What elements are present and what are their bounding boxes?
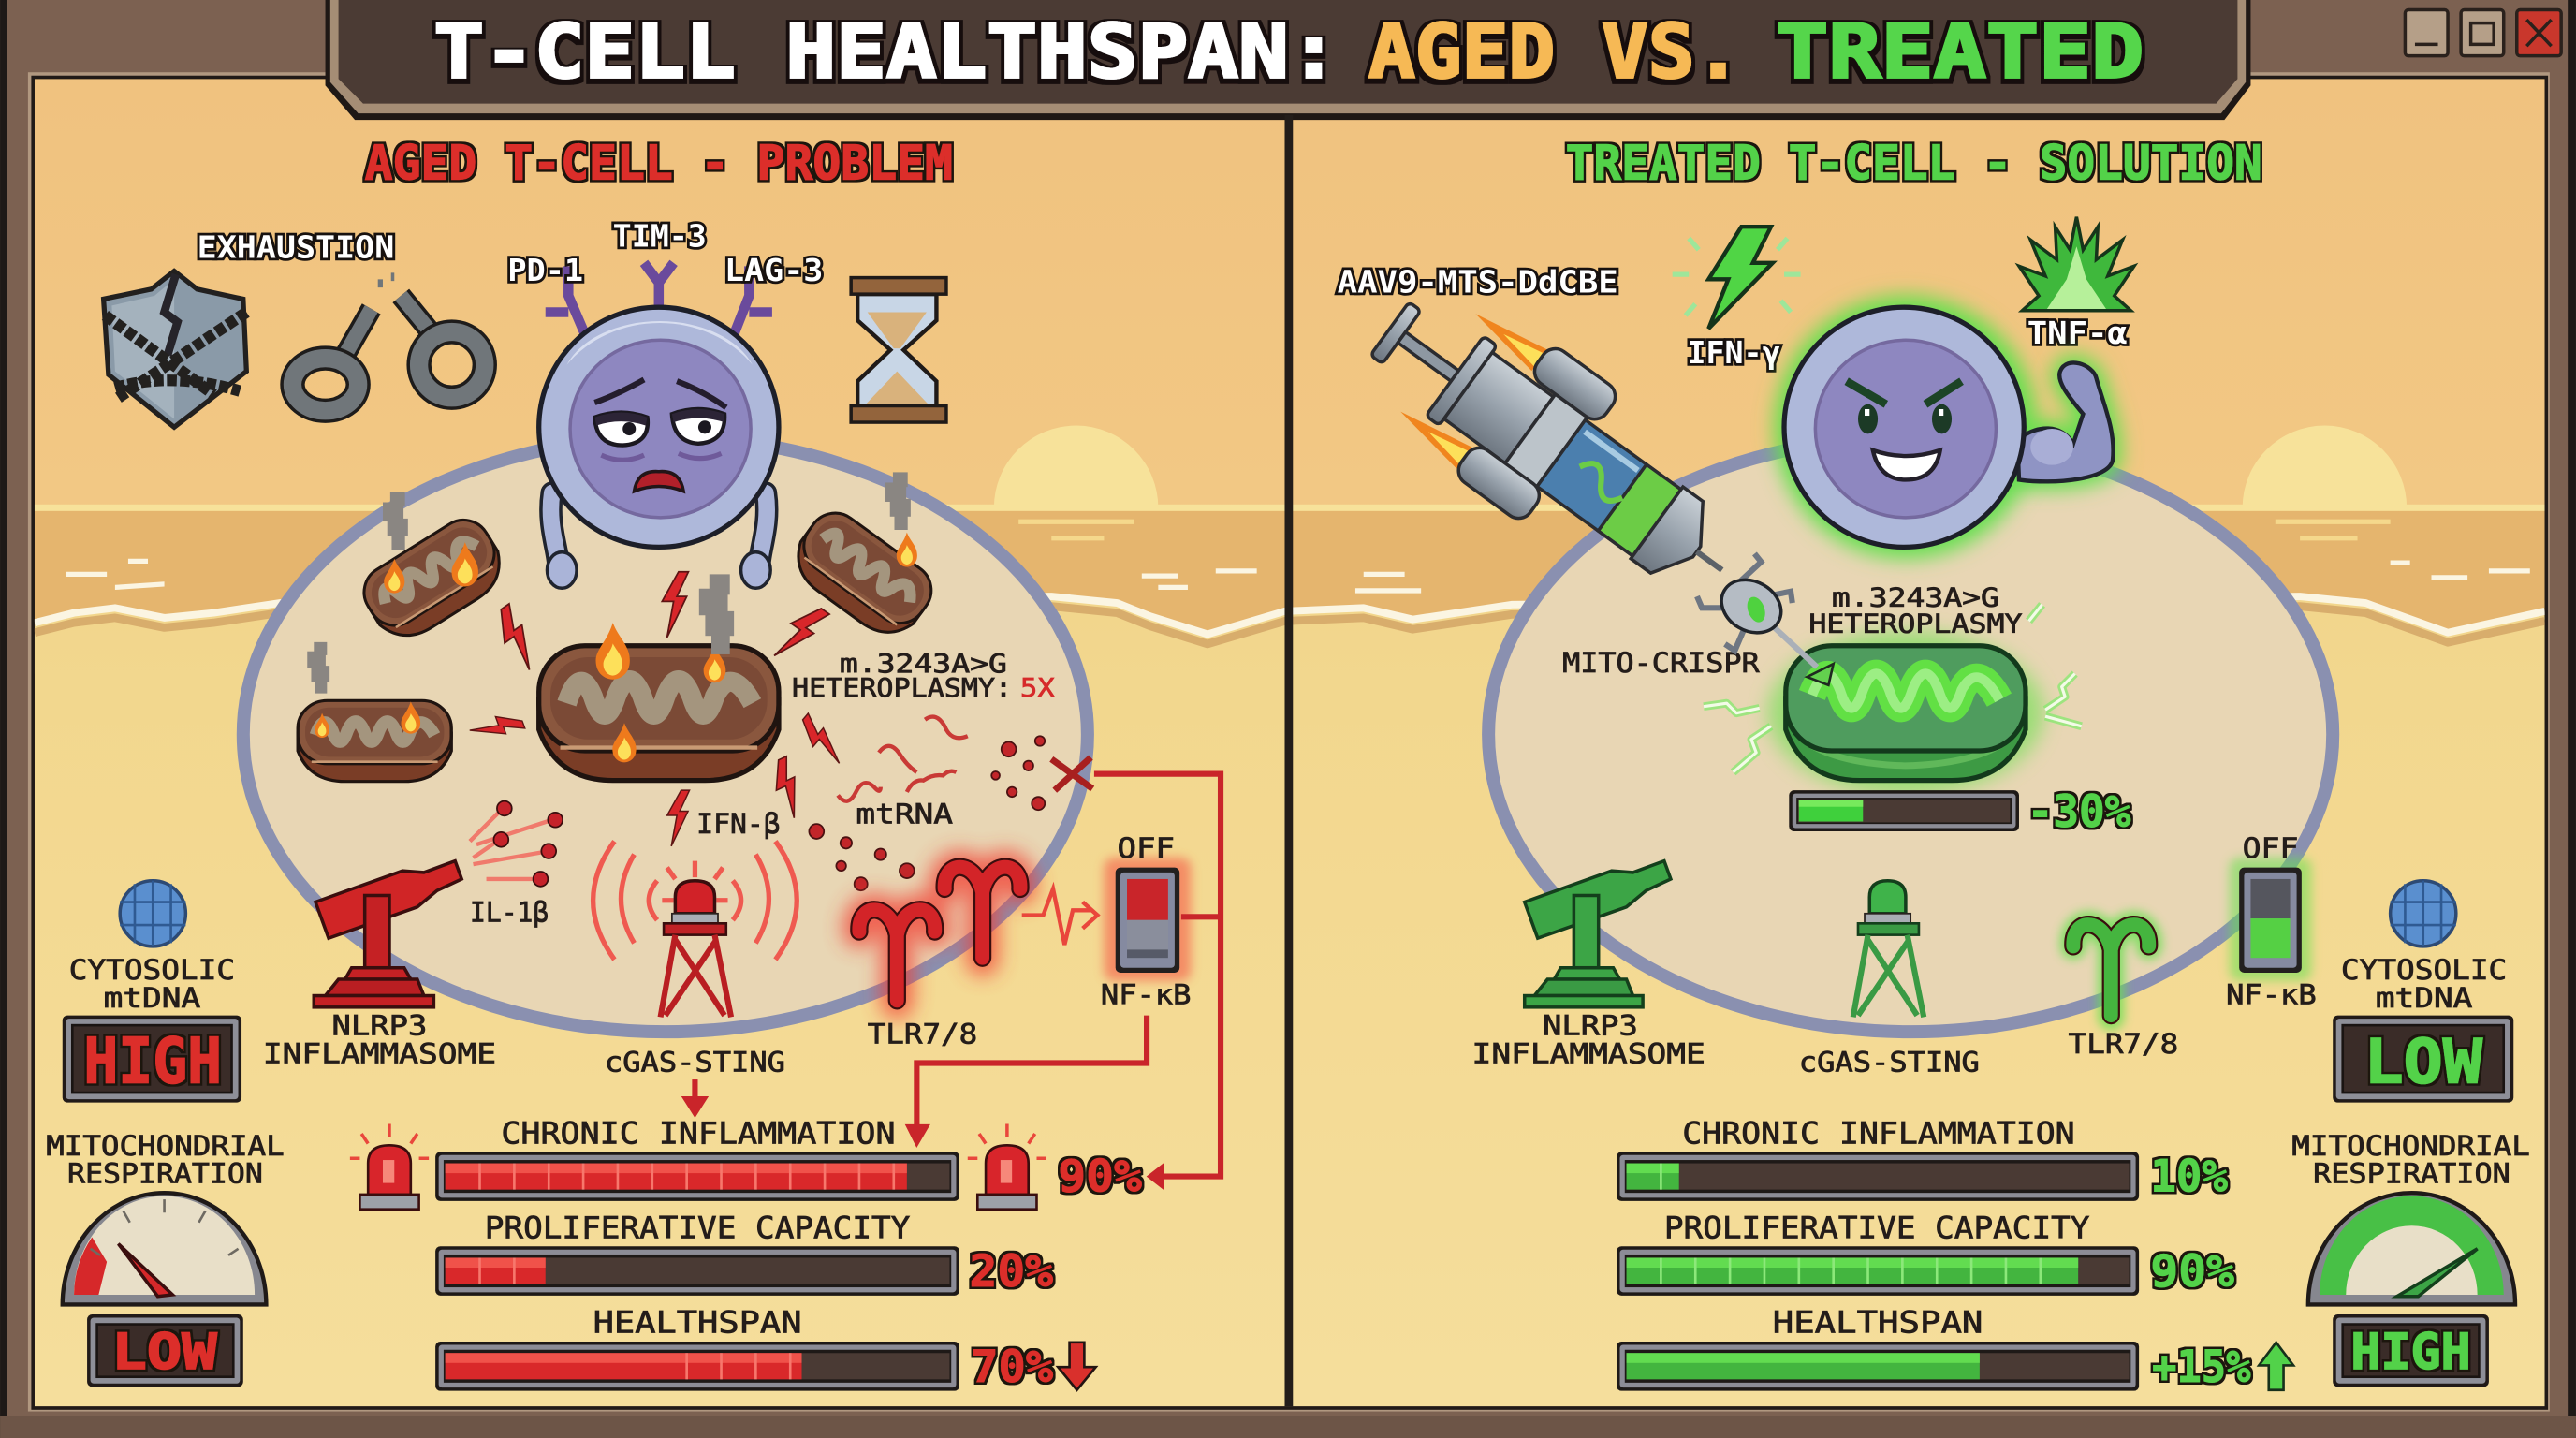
receptor labels: PD-1 — [507, 252, 583, 288]
AAV9 label: AAV9-MTS-DdCBE — [1338, 263, 1618, 300]
icon: TNF-alpha burst — [2019, 217, 2134, 311]
m.3243A>G heteroplasmy label: m.3243A>G — [1832, 584, 1999, 613]
TLR7/8 label: TLR7/8 — [2069, 1028, 2178, 1060]
mtRNA strands — [838, 717, 968, 801]
mitochondrial respiration gauge: RESPIRATION — [2313, 1158, 2510, 1190]
receptor labels — [507, 217, 823, 288]
heading: treated solution: TREATED T-CELL - SOLUTION — [1566, 136, 2262, 191]
mitochondrial respiration gauge: MITOCHONDRIAL — [2291, 1130, 2530, 1162]
cGAS-STING label: cGAS-STING — [1799, 1046, 1980, 1078]
energy sparks — [1704, 605, 2082, 772]
chart: chronic inflammation aged: 90% — [1058, 1151, 1142, 1202]
IFN-gamma label: IFN-γ — [1687, 334, 1781, 371]
NF-kB labels: NF-κB — [1101, 978, 1191, 1010]
TLR7/8 receptors red — [859, 867, 1020, 1003]
up arrow — [2259, 1343, 2293, 1390]
cytosolic mtDNA gauge — [63, 881, 242, 1103]
cytoplasm membrane — [1488, 437, 2333, 1032]
icon: globe — [120, 881, 185, 946]
heteroplasmy reduction bar — [1789, 786, 2131, 838]
m.3243A>G label: 5X — [1020, 674, 1055, 703]
determined eyes — [1847, 381, 1962, 433]
chart: chronic inflammation aged: CHRONIC INFLAMMATION — [501, 1115, 896, 1151]
chart: healthspan treated: +15% — [2152, 1342, 2251, 1393]
tired eyes — [594, 379, 726, 460]
pulse arrow — [1022, 888, 1097, 945]
exhausted T-cell character — [539, 307, 779, 588]
IL-1 beta label: IL-1β — [470, 897, 549, 929]
LOW status: LOW — [111, 1324, 217, 1381]
fires — [315, 533, 917, 762]
cGAS-STING label: cGAS-STING — [605, 1046, 785, 1078]
NLRP3 cannon red — [314, 861, 461, 1007]
IFN-beta label: IFN-β — [696, 808, 781, 840]
mtRNA label: mtRNA — [856, 798, 953, 829]
m.3243A>G heteroplasmy label — [1808, 584, 2022, 639]
damaged mitochondrion top right — [783, 503, 942, 648]
m.3243A>G heteroplasmy label: HETEROPLASMY — [1808, 610, 2022, 639]
damaged central mitochondrion — [539, 646, 779, 781]
NF-kB switch green — [2230, 858, 2311, 981]
mitochondria cluster — [298, 472, 942, 846]
m.3243A>G label: HETEROPLASMY: — [792, 674, 1012, 703]
cGAS-STING beacon tower green — [1853, 881, 1924, 1017]
smile — [1873, 450, 1940, 479]
title text: AGED VS. — [1368, 8, 1741, 95]
receptors — [546, 263, 772, 342]
chart: healthspan aged: 70% — [971, 1342, 1054, 1393]
panel: treated T-cell — [1338, 136, 2530, 1393]
NF-kB labels: OFF — [2243, 832, 2298, 864]
TLR7/8 label: TLR7/8 — [868, 1018, 977, 1049]
heteroplasmy reduction bar: -30% — [2027, 786, 2131, 838]
icon: globe — [2391, 881, 2456, 946]
cGAS-STING radio waves — [593, 842, 797, 960]
damaged mitochondrion top left — [354, 510, 514, 650]
cytoplasm membrane — [243, 437, 1088, 1032]
mitochondrial respiration gauge — [46, 1130, 285, 1387]
m.3243A>G label: m.3243A>G — [840, 650, 1007, 679]
TLR7/8 receptor green — [2073, 925, 2149, 1017]
frown — [634, 472, 683, 492]
mtDNA fragments — [809, 736, 1045, 890]
NLRP3 label — [263, 1010, 496, 1070]
NLRP3 label: NLRP3 — [332, 1010, 427, 1042]
NLRP3 label: INFLAMMASOME — [263, 1038, 496, 1070]
NF-kB labels — [2226, 832, 2317, 1010]
NLRP3 label: NLRP3 — [1543, 1010, 1638, 1042]
chart: proliferative capacity aged — [435, 1210, 1054, 1298]
cGAS-STING beacon tower red — [661, 881, 731, 1017]
NF-kB switch red — [1104, 858, 1191, 981]
Mito-CRISPR label: MITO-CRISPR — [1562, 647, 1760, 679]
window buttons — [2405, 10, 2561, 56]
title plate — [326, 0, 2250, 120]
sirens — [350, 1123, 1046, 1210]
chart: healthspan aged — [435, 1304, 1096, 1393]
chart: chronic inflammation treated — [1617, 1115, 2228, 1202]
chart: proliferative capacity aged: PROLIFERATIVE CAPACITY — [485, 1210, 910, 1245]
heading: aged problem: AGED T-CELL - PROBLEM — [365, 136, 953, 191]
down arrow — [1058, 1343, 1096, 1390]
cytosolic mtDNA gauge: CYTOSOLIC — [69, 954, 235, 986]
title text: TREATED — [1776, 8, 2144, 95]
icon: hourglass — [851, 278, 946, 422]
mitochondrial respiration gauge: RESPIRATION — [67, 1158, 263, 1190]
NF-kB labels — [1101, 832, 1191, 1010]
panel: aged T-cell — [46, 136, 1221, 1393]
title text: T-CELL HEALTHSPAN: — [433, 8, 1339, 95]
cytosolic mtDNA gauge: CYTOSOLIC — [2341, 954, 2507, 986]
cytosolic mtDNA gauge — [2333, 881, 2513, 1103]
NF-kB labels: OFF — [1117, 832, 1175, 864]
HIGH status: HIGH — [84, 1025, 222, 1098]
IL-1 beta projectiles — [470, 801, 563, 887]
energised T-cell character — [1774, 296, 2114, 559]
icon: chained cracked shield — [104, 271, 246, 427]
NLRP3 label: INFLAMMASOME — [1472, 1038, 1705, 1070]
receptor labels: LAG-3 — [724, 252, 823, 288]
chart: healthspan treated: HEALTHSPAN — [1773, 1304, 1983, 1340]
chart: proliferative capacity aged: 20% — [970, 1246, 1054, 1298]
icon: gene therapy rocket syringe — [1342, 261, 1771, 635]
LOW status — [87, 1314, 243, 1387]
NF-kB labels: NF-κB — [2226, 978, 2317, 1010]
exhaustion label: EXHAUSTION — [198, 229, 394, 266]
Mito-CRISPR nanobot — [1697, 553, 1834, 685]
chart: healthspan treated — [1617, 1304, 2293, 1393]
LOW status — [2333, 1016, 2513, 1103]
chart: chronic inflammation aged — [435, 1115, 1142, 1202]
title text — [433, 8, 2144, 95]
cytosolic mtDNA gauge: mtDNA — [104, 982, 200, 1014]
chart: healthspan aged: HEALTHSPAN — [593, 1304, 802, 1340]
signal arrows red — [683, 774, 1221, 1188]
damaged mitochondrion lower left — [298, 700, 451, 782]
m.3243A>G label — [792, 650, 1055, 703]
NLRP3 cannon green — [1525, 861, 1671, 1007]
chart: chronic inflammation treated: CHRONIC INFLAMMATION — [1682, 1115, 2075, 1151]
smoke — [307, 472, 911, 694]
LOW status: LOW — [2364, 1028, 2483, 1098]
centre divider — [1284, 115, 1293, 1406]
icon: broken handcuffs — [292, 272, 485, 411]
chart: proliferative capacity treated: PROLIFERATIVE CAPACITY — [1664, 1210, 2089, 1245]
icon: IFN-gamma bolt — [1673, 227, 1801, 329]
NLRP3 label — [1472, 1010, 1705, 1070]
receptor labels: TIM-3 — [613, 217, 707, 254]
mitochondrial respiration gauge — [2291, 1130, 2530, 1387]
chart: chronic inflammation treated: 10% — [2150, 1151, 2228, 1202]
chart: proliferative capacity treated: 90% — [2150, 1246, 2234, 1298]
repaired mitochondrion — [1767, 631, 2043, 795]
HIGH status — [2333, 1314, 2489, 1387]
cytosolic mtDNA gauge: mtDNA — [2376, 982, 2472, 1014]
mitochondrial respiration gauge: MITOCHONDRIAL — [46, 1130, 285, 1162]
TNF-alpha label: TNF-α — [2027, 315, 2128, 351]
broken DNA X — [1051, 757, 1092, 790]
chart: proliferative capacity treated — [1617, 1210, 2234, 1298]
lightning bolts — [468, 572, 851, 846]
HIGH status: HIGH — [2351, 1324, 2471, 1381]
